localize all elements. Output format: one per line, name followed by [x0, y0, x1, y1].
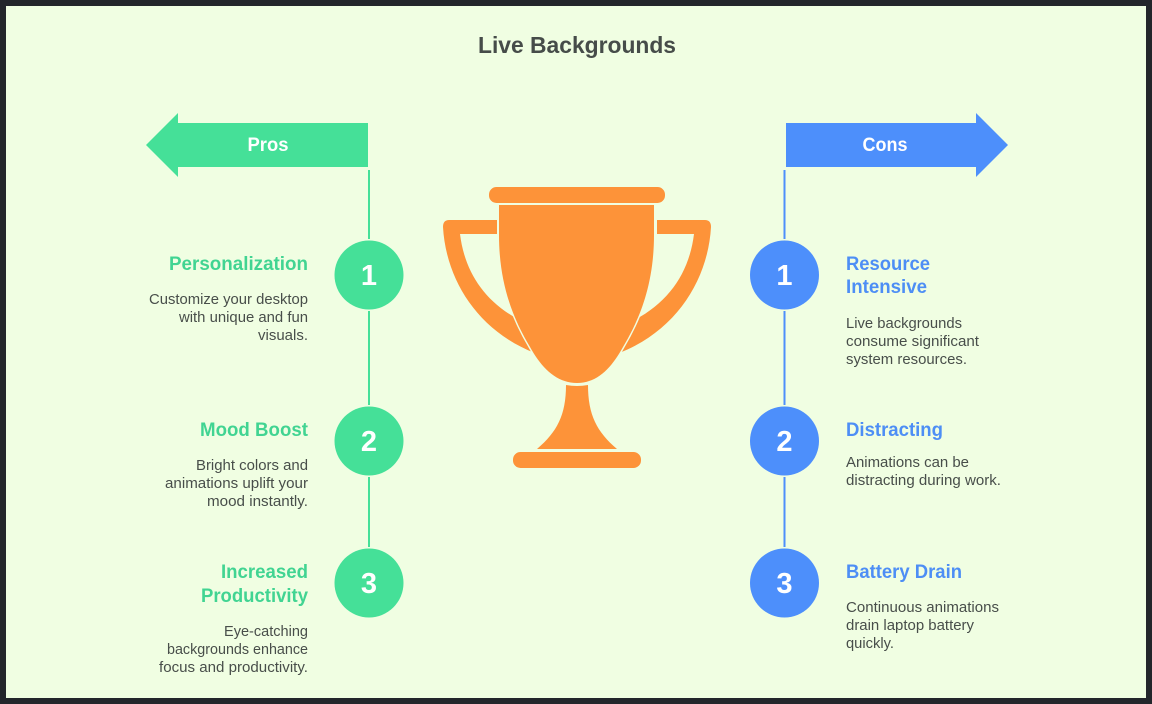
cons item 1: consume significant — [846, 334, 979, 350]
pros item 2: 2 — [361, 426, 377, 458]
pros item 1: visuals. — [258, 328, 308, 344]
pros item 3: 3 — [361, 568, 377, 600]
pros item 1: Customize your desktop — [149, 292, 308, 308]
cons item 3: Continuous animations — [846, 600, 999, 616]
pros item 1 — [149, 240, 404, 344]
pros item 2 — [165, 406, 404, 510]
cons item 3 — [750, 548, 999, 652]
cons item 2: Distracting — [846, 420, 943, 441]
cons item 1: Resource — [846, 254, 930, 275]
pros item 3: backgrounds enhance — [167, 642, 308, 658]
cons item 2 — [750, 406, 1001, 489]
cons item 1: 1 — [776, 260, 793, 292]
cons item 2: Animations can be — [846, 455, 969, 471]
pros item 2: Bright colors and — [196, 458, 308, 474]
arrow: cons: Cons — [862, 135, 908, 156]
pros item 2: animations uplift your — [165, 476, 308, 492]
title: Live Backgrounds — [478, 32, 676, 58]
pros item 1: with unique and fun — [178, 310, 308, 326]
pros item 3 — [159, 548, 404, 676]
pros item 3: Increased — [221, 562, 308, 583]
cons item 1: Intensive — [846, 277, 927, 298]
pros item 3: Eye-catching — [224, 624, 308, 640]
pros item 2: Mood Boost — [200, 420, 309, 441]
cons item 1: system resources. — [846, 352, 967, 368]
cons item 2: distracting during work. — [846, 473, 1001, 489]
pros item 2: mood instantly. — [207, 494, 308, 510]
pros item 3: Productivity — [201, 586, 308, 607]
cons item 1: Live backgrounds — [846, 316, 962, 332]
cons item 3: quickly. — [846, 636, 894, 652]
arrow: pros: Pros — [248, 135, 288, 156]
arrow: pros — [146, 113, 368, 177]
cons item 3: Battery Drain — [846, 562, 962, 583]
pros timeline — [368, 170, 370, 547]
cons item 3: drain laptop battery — [846, 618, 975, 634]
arrow: cons — [786, 113, 1008, 177]
icon: trophy — [443, 187, 711, 468]
cons item 2: 2 — [776, 426, 793, 458]
cons timeline — [784, 170, 786, 547]
pros item 1: Personalization — [169, 254, 308, 275]
cons item 1 — [750, 240, 979, 368]
pros item 3: focus and productivity. — [159, 660, 308, 676]
cons item 3: 3 — [776, 568, 793, 600]
pros item 1: 1 — [361, 260, 377, 292]
